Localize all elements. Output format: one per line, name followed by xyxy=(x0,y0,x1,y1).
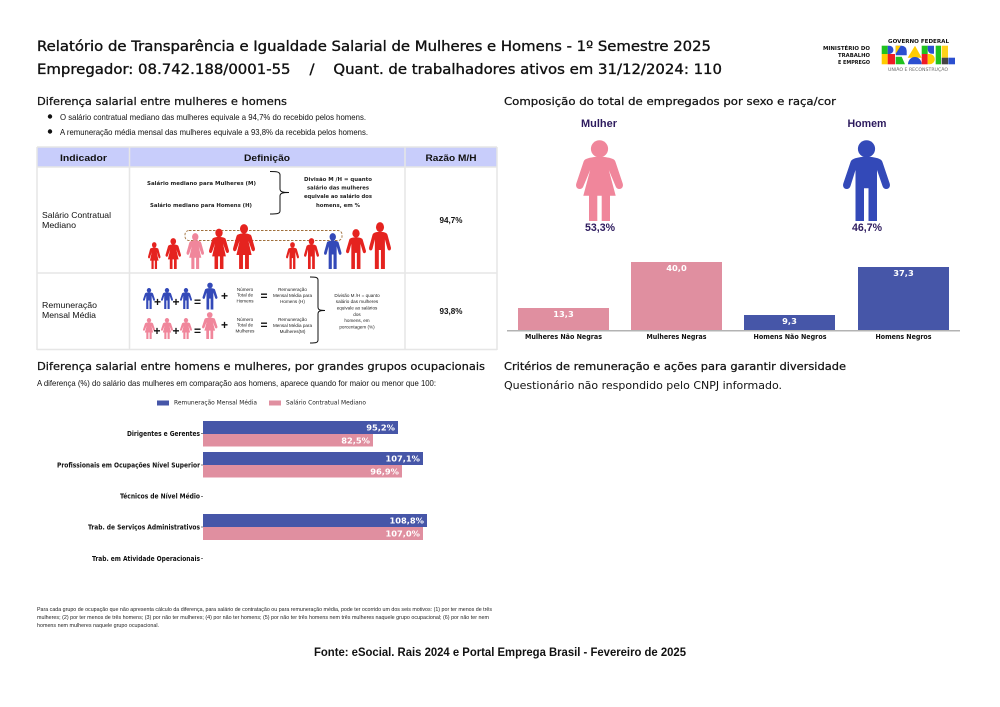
bar chart: grupos ocupacionais: 82,5% xyxy=(341,436,371,446)
definition: salário mediano: Divisão M /H = quanto xyxy=(304,177,372,183)
definition: divisão M/H: Divisão M /H = quanto xyxy=(334,293,380,298)
row label: salário contratual mediano: Mediano xyxy=(42,220,76,230)
footnote xyxy=(37,607,492,629)
definition: fórmula homens: Homens (H) xyxy=(280,299,305,304)
bar chart: grupos ocupacionais: Técnicos de Nível Médio xyxy=(120,492,200,500)
bar chart: grupos ocupacionais: Profissionais em Ocupações Nível Superior xyxy=(57,462,201,470)
definition: salário mediano: salário das mulheres xyxy=(307,184,370,192)
definition: fórmula homens: Mensal Média para xyxy=(273,293,312,298)
text block: questionário: Questionário não respondido pelo CNPJ informado. xyxy=(504,379,782,392)
logo: governo federal brasil: UNIÃO E RECONSTRUÇÃO xyxy=(888,66,948,73)
table header xyxy=(37,147,497,167)
heading: composição: Composição do total de empregados por sexo e raça/cor xyxy=(504,95,836,108)
definition: divisão M/H xyxy=(310,277,380,343)
definition: fórmula mulheres: Total de xyxy=(237,322,253,328)
definition: fórmula homens: Remuneração xyxy=(278,287,307,292)
bar chart: grupos ocupacionais xyxy=(57,421,427,563)
logo: ministério: MINISTÉRIO DO xyxy=(823,44,870,52)
definition: fórmula mulheres xyxy=(143,312,312,339)
bar chart: composição: Homens Não Negros xyxy=(754,333,826,341)
bar chart: composição: 40,0 xyxy=(666,263,687,273)
title xyxy=(37,39,722,78)
definition: fórmula mulheres: Mulheres(M) xyxy=(280,329,306,334)
heading: diferença por grupos ocupacionais: Diferença salarial entre homens e mulheres, por grandes grupos ocupacionais xyxy=(37,360,485,373)
definition: divisão M/H: equivale ao salários xyxy=(337,306,378,310)
definition: fórmula mulheres: + xyxy=(221,318,228,332)
definition: divisão M/H: salário das mulheres xyxy=(336,299,379,304)
definition: salário mediano: homens, em % xyxy=(316,203,360,209)
icon: mulher 53,3% xyxy=(576,118,623,234)
definition: fórmula mulheres: Mensal Média para xyxy=(273,323,312,328)
source: Fonte: eSocial. Rais 2024 e Portal Emprega Brasil - Fevereiro de 2025 xyxy=(314,645,686,659)
table header: Definição xyxy=(244,153,290,164)
bar chart: grupos ocupacionais: 96,9% xyxy=(370,466,400,476)
value: 93,8%: 93,8% xyxy=(440,306,463,316)
definition: divisão M/H: dos xyxy=(353,312,361,317)
footnote: mulheres; (2) por ter menos de três homens; (3) por não ter mulheres; (4) por não ter homens; (5) por não ter três homens nem três mulheres naquele grupo ocupacional; (6) por não ter nem xyxy=(37,615,489,621)
definition: salário mediano: equivale ao salário dos xyxy=(304,193,373,200)
definition: salário mediano xyxy=(147,172,373,214)
icon: homem 46,7% xyxy=(843,118,890,234)
text block: bullet points: O salário contratual mediano das mulheres equivale a 94,7% do recebido pelos homens. xyxy=(60,112,366,122)
footnote: Para cada grupo de ocupação que não apresenta cálculo da diferença, para salário de contratação ou para remuneração média, pode ter ocorrido um dos seis motivos: (1) por ter menos de três xyxy=(37,607,492,613)
definition: fórmula homens: Número xyxy=(237,287,254,292)
heading: diferença salarial: Diferença salarial entre mulheres e homens xyxy=(37,95,287,108)
row label: remuneração mensal média: Mensal Média xyxy=(42,310,96,320)
legend: Remuneração Mensal Média xyxy=(174,398,257,406)
definition: fórmula homens: Total de xyxy=(237,292,253,298)
definition: fórmula mulheres: = xyxy=(260,318,268,332)
bar chart: grupos ocupacionais: 107,0% xyxy=(385,528,421,538)
definition: fórmula homens: + xyxy=(172,295,180,309)
value: 94,7%: 94,7% xyxy=(440,215,463,225)
table header: Indicador xyxy=(60,153,107,164)
text block: explicação: A diferença (%) do salário das mulheres em comparação aos homens, aparece quando for maior ou menor que 100: xyxy=(37,378,436,388)
bar chart: composição: Mulheres Negras xyxy=(646,333,706,341)
footnote: homens nem mulheres naquele grupo ocupacional. xyxy=(37,623,159,629)
definition: fórmula homens: = xyxy=(260,289,268,303)
definition: fórmula homens: = xyxy=(194,295,201,309)
bar chart: composição: Mulheres Não Negras xyxy=(525,333,602,341)
definition: fórmula mulheres: + xyxy=(172,324,180,338)
text block: bullet points: A remuneração média mensal das mulheres equivale a 93,8% da recebida pelos homens. xyxy=(60,127,368,137)
row label: salário contratual mediano: Salário Contratual xyxy=(42,210,111,220)
bar chart: grupos ocupacionais: Dirigentes e Gerentes xyxy=(127,430,200,438)
bar chart: composição: 37,3 xyxy=(893,268,914,278)
bar chart: grupos ocupacionais: Trab. em Atividade Operacionais xyxy=(92,555,200,563)
legend xyxy=(157,398,366,406)
row label: remuneração mensal média: Remuneração xyxy=(42,300,97,310)
logo: governo federal brasil: GOVERNO FEDERAL xyxy=(888,39,949,45)
definition: fórmula mulheres: Mulheres xyxy=(236,328,255,334)
bar chart: grupos ocupacionais: 95,2% xyxy=(366,422,396,432)
definition: fórmula mulheres: Número xyxy=(237,317,254,322)
legend: Salário Contratual Mediano xyxy=(286,398,366,406)
table header: Razão M/H xyxy=(426,153,477,164)
definition: fórmula mulheres: = xyxy=(194,324,201,338)
row label: salário contratual mediano xyxy=(42,210,111,230)
definition: fórmula mulheres: Remuneração xyxy=(278,317,307,322)
bar chart: composição: Homens Negros xyxy=(876,333,932,341)
definition: divisão M/H: homens, em xyxy=(344,318,370,323)
logo: ministério: E EMPREGO xyxy=(838,60,870,66)
title: Empregador: 08.742.188/0001-55 / Quant. de trabalhadores ativos em 31/12/2024: 110 xyxy=(37,62,722,78)
title: Relatório de Transparência e Igualdade Salarial de Mulheres e Homens - 1º Semestre 2025 xyxy=(37,39,711,55)
definition: salário mediano: Salário mediano para Mulheres (M) xyxy=(147,180,256,187)
icon: homem 46,7%: 46,7% xyxy=(852,222,882,234)
row label: remuneração mensal média xyxy=(42,300,97,320)
logo: governo federal brasil xyxy=(882,39,955,73)
bar chart: composição: 9,3 xyxy=(782,316,797,326)
definition: fórmula homens xyxy=(143,283,312,310)
icon: mulher 53,3%: Mulher xyxy=(581,118,618,130)
bar chart: grupos ocupacionais: Trab. de Serviços Administrativos xyxy=(88,524,200,532)
logo: ministério: TRABALHO xyxy=(838,53,870,59)
bar chart: grupos ocupacionais: 107,1% xyxy=(385,454,421,464)
icons: pessoas por salário xyxy=(148,222,391,269)
heading: critérios: Critérios de remuneração e ações para garantir diversidade xyxy=(504,360,846,373)
bar chart: composição: 13,3 xyxy=(553,309,574,319)
definition: divisão M/H: porcentagem (%) xyxy=(339,324,375,330)
icon: homem 46,7%: Homem xyxy=(848,118,887,130)
definition: fórmula mulheres: + xyxy=(153,324,161,338)
icon: mulher 53,3%: 53,3% xyxy=(585,222,615,234)
definition: salário mediano: Salário mediano para Homens (H) xyxy=(150,202,252,209)
definition: fórmula homens: Homens xyxy=(236,298,254,304)
bar chart: composição xyxy=(507,262,960,341)
logo: ministério xyxy=(823,44,870,66)
definition: fórmula homens: + xyxy=(154,295,161,309)
text block: bullet points xyxy=(48,112,368,137)
bar chart: grupos ocupacionais: 108,8% xyxy=(389,516,425,526)
panel: tabela de indicadores xyxy=(37,147,497,350)
definition: fórmula homens: + xyxy=(221,289,228,303)
